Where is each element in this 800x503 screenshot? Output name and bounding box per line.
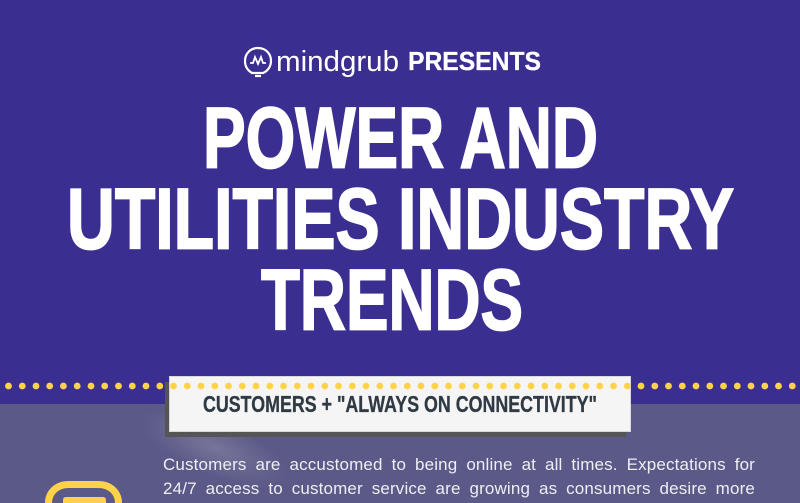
presents label: PRESENTS: [408, 46, 541, 76]
panel: customers section background: [0, 392, 800, 503]
title: [67, 90, 734, 348]
title: TRENDS: [261, 252, 523, 348]
logo wordmark: mindgrub: [276, 46, 399, 78]
dotted yellow divider: [5, 383, 796, 389]
section heading: CUSTOMERS + "ALWAYS ON CONNECTIVITY": [203, 391, 597, 417]
title: POWER AND: [203, 90, 598, 186]
icon: mindgrub logo: [245, 48, 271, 76]
section heading banner: [170, 376, 630, 432]
section heading banner shadow: [165, 382, 626, 437]
body text: 24/7 access to customer service are growing as consumers desire more: [163, 479, 755, 498]
icon: chat bubble: [48, 484, 118, 503]
body text: Customers are accustomed to being online at all times. Expectations for: [163, 455, 755, 474]
body text: [163, 455, 755, 498]
